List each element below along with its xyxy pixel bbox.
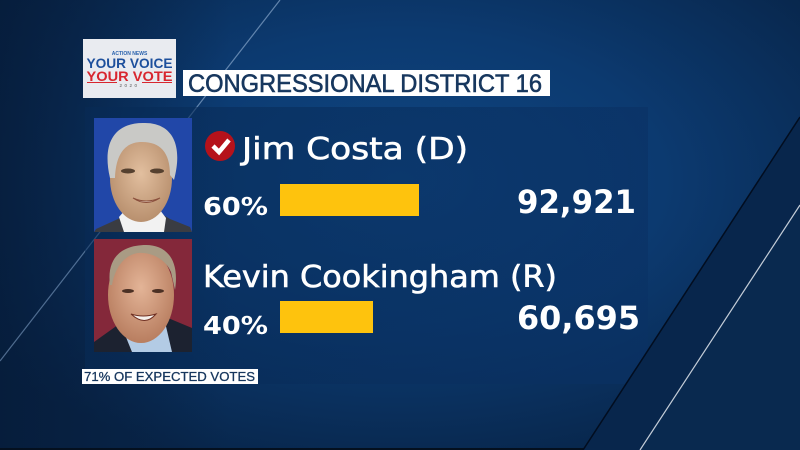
icon: winner check mark [205, 131, 235, 161]
vote bar: Jim Costa [280, 184, 419, 216]
logo: Your Voice Your Vote 2020: 2020 [119, 83, 140, 88]
heading: district title: CONGRESSIONAL DISTRICT 16 [188, 70, 542, 98]
portrait: Jim Costa [94, 118, 192, 232]
vote percent: Jim Costa: 60% [203, 192, 268, 221]
candidate name: Jim Costa: Jim Costa (D) [240, 132, 468, 167]
results panel [85, 107, 648, 384]
logo: Your Voice Your Vote 2020: ACTION NEWS [112, 51, 148, 57]
portrait: Kevin Cookingham [94, 239, 192, 352]
vote count: Kevin Cookingham: 60,695 [517, 299, 640, 337]
logo: Your Voice Your Vote 2020 [83, 39, 176, 98]
vote count: Jim Costa: 92,921 [517, 183, 636, 221]
logo: Your Voice Your Vote 2020: YOUR VOTE [86, 68, 172, 84]
vote bar: Kevin Cookingham [280, 301, 373, 333]
vote percent: Kevin Cookingham: 40% [203, 311, 268, 340]
logo: Your Voice Your Vote 2020: YOUR VOICE [86, 55, 172, 71]
footnote: expected votes: 71% OF EXPECTED VOTES [84, 369, 255, 384]
candidate name: Kevin Cookingham: Kevin Cookingham (R) [203, 260, 557, 295]
